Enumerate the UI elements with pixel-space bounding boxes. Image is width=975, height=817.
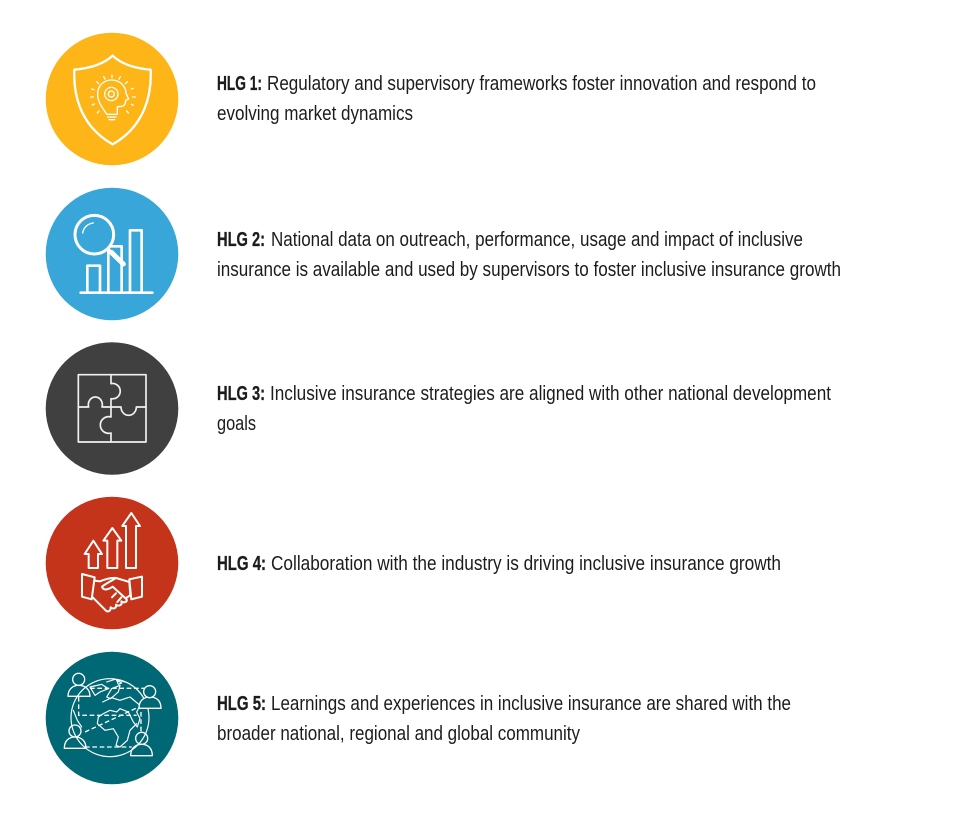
HLG 2 description: National data on outreach, performance, usage and impact of inclusive (271, 229, 803, 251)
HLG 5 label: HLG 5: (217, 693, 266, 715)
icon: magnifier over bar chart (46, 188, 178, 320)
HLG 3 description: goals (217, 413, 256, 435)
icon: handshake and rising arrows (46, 497, 178, 629)
HLG 4 description: Collaboration with the industry is driving inclusive insurance growth (271, 553, 781, 575)
HLG 5 description: broader national, regional and global community (217, 723, 580, 745)
HLG 1 description: evolving market dynamics (217, 103, 413, 125)
HLG 3 label: HLG 3: (217, 383, 265, 405)
HLG 1 description: Regulatory and supervisory frameworks foster innovation and respond to (267, 73, 816, 95)
HLG 2 description: insurance is available and used by supervisors to foster inclusive insurance growth (217, 259, 841, 281)
HLG 2 row (46, 188, 841, 320)
HLG 4 row (46, 497, 781, 629)
HLG 2 label: HLG 2: (217, 229, 265, 251)
HLG 4 label: HLG 4: (217, 553, 266, 575)
HLG 1 label: HLG 1: (217, 73, 262, 95)
HLG 1 description (217, 73, 816, 125)
HLG 3 row (46, 342, 831, 475)
icon: globe with connected people (46, 652, 178, 784)
HLG 5 description (217, 693, 791, 745)
icon: shield with lightbulb and gear (46, 33, 178, 165)
icon: puzzle (46, 342, 178, 475)
HLG 5 description: Learnings and experiences in inclusive insurance are shared with the (271, 693, 791, 715)
HLG 1 row (46, 33, 816, 165)
HLG 3 description (217, 383, 831, 435)
HLG 5 row (46, 652, 791, 784)
HLG 3 description: Inclusive insurance strategies are aligned with other national development (270, 383, 831, 405)
HLG 2 description (217, 229, 841, 281)
